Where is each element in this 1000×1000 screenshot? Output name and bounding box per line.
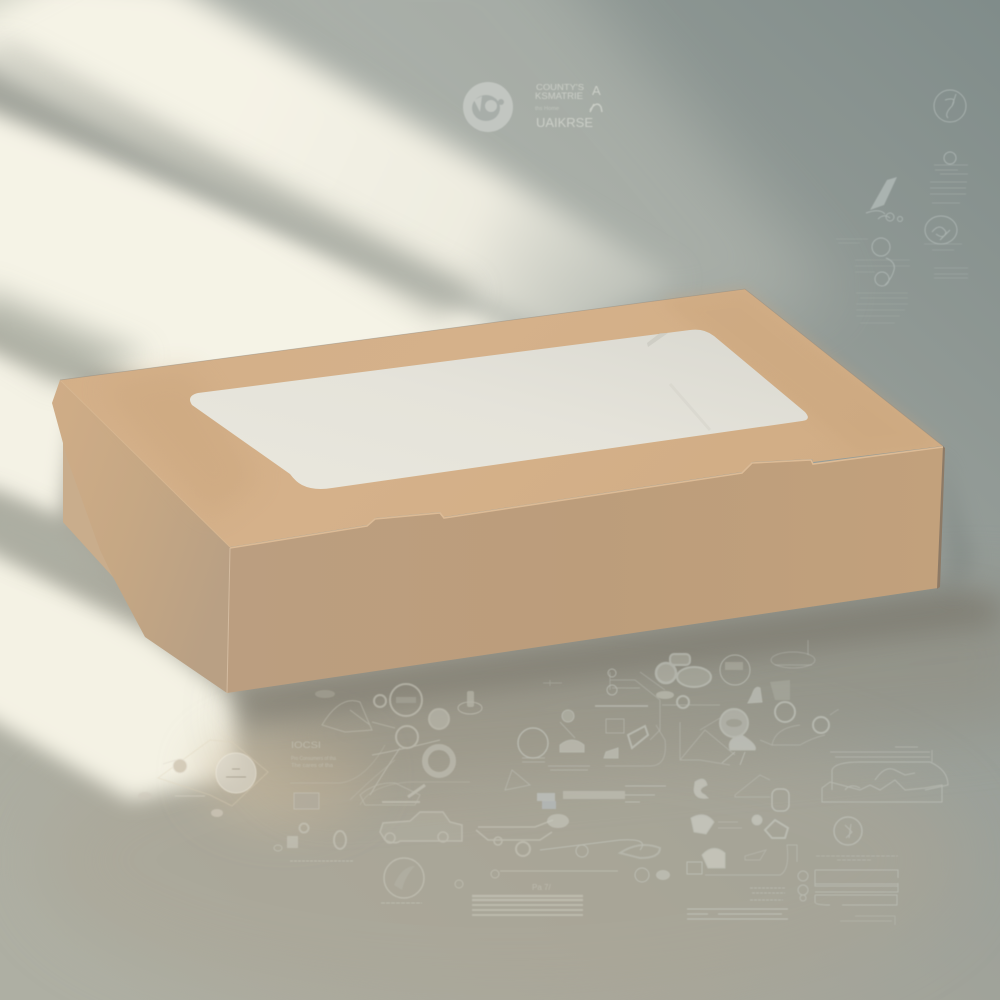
small pin bbox=[455, 880, 463, 888]
lower right icons bbox=[687, 775, 797, 875]
pin icon bbox=[458, 691, 482, 714]
large donut bbox=[370, 740, 453, 797]
timeline and bars bbox=[472, 870, 618, 915]
logo wordmark: A bbox=[592, 83, 601, 98]
right column of faint icons and captions bbox=[836, 90, 968, 323]
logo wordmark: KSMATRIE bbox=[535, 91, 583, 101]
captions bbox=[687, 888, 788, 919]
heading text left: The cares of tha bbox=[291, 763, 333, 769]
right hub bbox=[748, 680, 838, 745]
box front face bbox=[227, 447, 943, 693]
timeline and bars: Pa 7/ bbox=[532, 883, 551, 892]
blobs near timeline bbox=[635, 868, 670, 882]
icon: swirl ring bbox=[924, 216, 968, 278]
back edge highlight bbox=[60, 289, 943, 446]
corner fold bbox=[227, 548, 230, 693]
centre hub bbox=[680, 709, 800, 765]
floor infographic: centre-left cluster bbox=[274, 684, 618, 915]
heading text left: IOCSI bbox=[291, 740, 321, 750]
box left side bbox=[52, 380, 230, 693]
floor infographic: centre cluster bbox=[505, 640, 838, 919]
icon: rocket bbox=[866, 177, 902, 222]
logo wordmark: COUNTY'S bbox=[536, 83, 584, 92]
small person diagram bbox=[274, 824, 353, 861]
box top face bbox=[60, 289, 943, 547]
small panels and connector bbox=[595, 669, 665, 766]
logo circle bbox=[463, 82, 513, 132]
logo wordmark bbox=[535, 83, 602, 130]
small badge bbox=[163, 759, 205, 796]
icon: leaf ring bbox=[934, 90, 966, 122]
warm glow on the floor bbox=[200, 727, 370, 823]
label card bbox=[360, 783, 420, 805]
top-to-left fold bbox=[60, 380, 230, 547]
icon: small circle with caption bbox=[930, 152, 968, 203]
logo emblem bbox=[472, 95, 504, 121]
badge circles bbox=[315, 684, 449, 748]
floor infographic: left cluster bbox=[138, 740, 268, 817]
truck on right of car row bbox=[540, 814, 660, 858]
landscape panel bbox=[822, 762, 948, 802]
callout disc bbox=[158, 740, 268, 806]
front face right edge bbox=[937, 446, 945, 589]
table bbox=[798, 870, 898, 925]
icon: spirals with captions bbox=[836, 238, 910, 323]
diagonal window light beams bbox=[0, 0, 680, 800]
front top crease bbox=[230, 447, 943, 548]
car one bbox=[380, 812, 553, 856]
round icon with caption bbox=[381, 858, 424, 903]
curved connector lines bbox=[290, 745, 470, 805]
kraft box bbox=[52, 289, 945, 693]
leaf outline group bbox=[322, 701, 395, 732]
blob markers bbox=[138, 792, 223, 817]
icons row at centre bbox=[518, 680, 590, 770]
round icon bbox=[834, 817, 862, 845]
top hub ring cluster bbox=[640, 640, 815, 740]
box inner left flap bbox=[63, 443, 113, 577]
logo wordmark: UAIKRSE bbox=[536, 115, 593, 130]
floor infographic: right panel bbox=[798, 747, 948, 925]
long bar bbox=[505, 770, 666, 809]
caption bbox=[816, 856, 898, 860]
shaded band on top face bbox=[100, 289, 943, 520]
stone card bbox=[294, 793, 319, 809]
heading text left bbox=[291, 740, 336, 769]
logo badge bbox=[463, 82, 602, 132]
cellophane window bbox=[190, 330, 808, 489]
logo wordmark: ths Home bbox=[535, 106, 559, 112]
heading text left: Pro Consumers of tha bbox=[291, 756, 336, 762]
heading lines bbox=[830, 747, 932, 762]
box shadow bbox=[225, 450, 1000, 790]
